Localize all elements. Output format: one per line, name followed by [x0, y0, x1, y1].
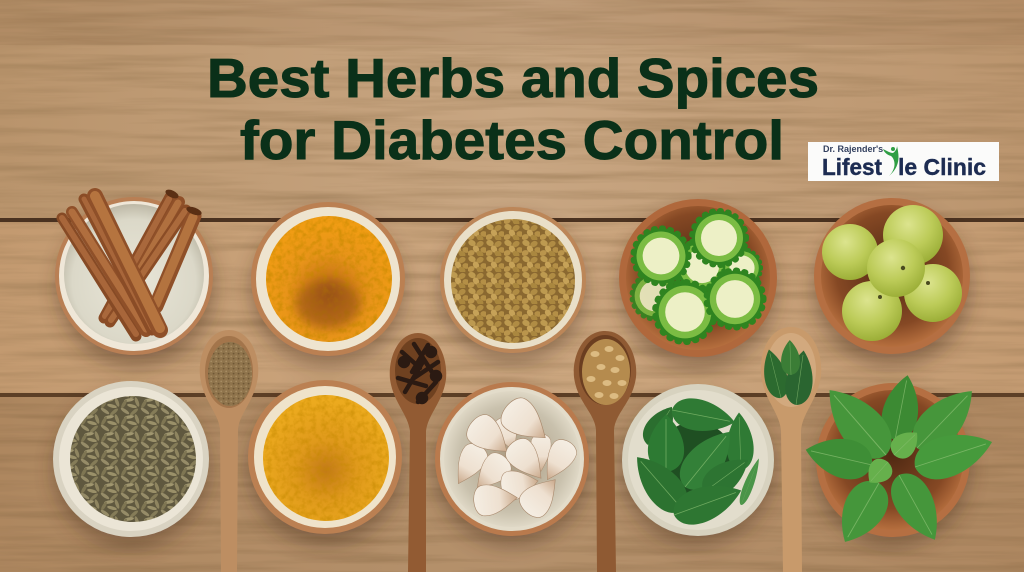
basil leaves: [801, 372, 998, 552]
title: for Diabetes Control: [240, 109, 784, 171]
bottom plank: [0, 396, 1024, 572]
powder mound: [296, 280, 360, 328]
spoon: cloves: [390, 333, 446, 572]
logo: Dr. Rajender's Lifestyle Clinic: Lifest: [822, 154, 882, 180]
bowl: basil: [801, 372, 998, 552]
seeds: [70, 396, 196, 522]
amla fruits: [822, 205, 962, 341]
spoon: ground spice: [200, 330, 258, 572]
bowl: garlic: [435, 382, 589, 536]
leaves: [758, 340, 817, 407]
logo: Dr. Rajender's Lifestyle Clinic: [808, 142, 999, 181]
seeds mound: [582, 339, 630, 405]
title: Best Herbs and Spices: [207, 47, 819, 109]
icon: green figure: [883, 146, 899, 176]
cinnamon sticks: [62, 196, 194, 336]
seeds: [451, 219, 575, 343]
cloves: [398, 344, 440, 402]
bowl: cinnamon: [55, 188, 213, 355]
middle plank: [0, 221, 1024, 396]
bowl: fenugreek seeds: [440, 207, 586, 353]
title: [207, 47, 819, 171]
bowl: amla: [814, 198, 970, 354]
bowl: turmeric powder (bottom): [248, 380, 402, 534]
logo: Dr. Rajender's Lifestyle Clinic: Dr. Rajender's: [823, 144, 883, 154]
bowl shadows: [54, 210, 970, 547]
bowl: turmeric powder (top): [251, 202, 405, 356]
spoon: seeds: [574, 331, 636, 572]
spoon: leaves: [758, 327, 821, 572]
leaves: [624, 395, 763, 531]
bowl: fennel seeds: [53, 381, 209, 537]
garlic cloves: [447, 392, 581, 522]
ground spice mound: [208, 342, 252, 406]
logo: Dr. Rajender's Lifestyle Clinic: le Clinic: [898, 154, 986, 180]
gourd slices: [632, 273, 678, 319]
bowl: curry leaves: [622, 384, 774, 536]
top plank: [0, 0, 1024, 221]
bowl: bitter gourd: [619, 199, 777, 357]
